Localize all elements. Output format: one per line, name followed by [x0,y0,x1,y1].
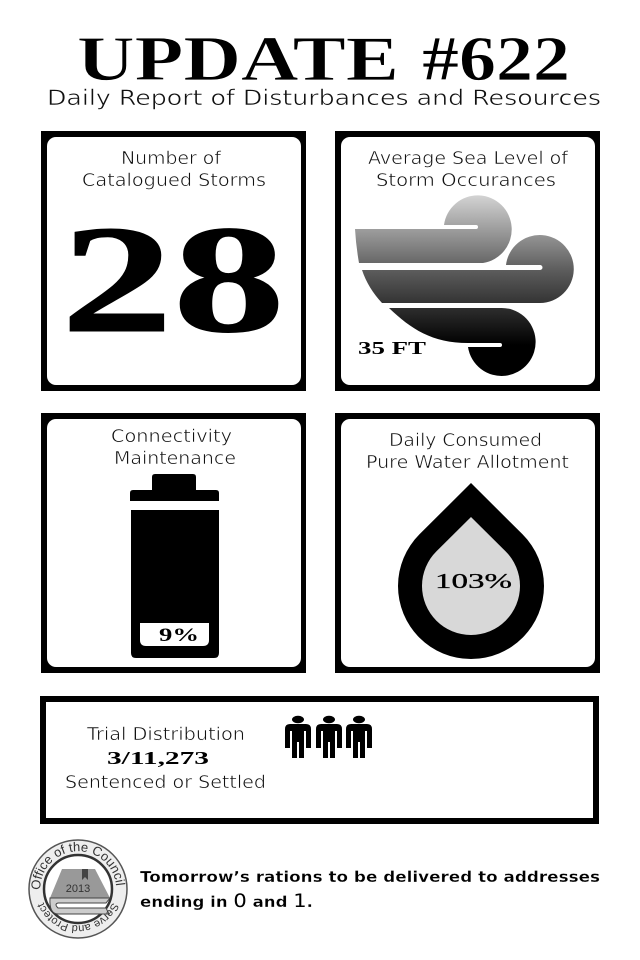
panel: connectivity maintenance [41,413,306,673]
panel: number of catalogued storms [41,131,306,391]
trial text [65,724,266,793]
panel: average sea level [335,131,600,391]
seal: office of the council [28,839,128,939]
panel heading: storms: Number of [121,148,222,169]
storm count: 28 [61,195,285,365]
panel heading: water [366,430,569,473]
icon: wind and clouds [355,195,574,376]
title: #622 [422,24,570,94]
panel heading: connectivity: Connectivity [111,426,232,447]
subtitle: Daily Report of Disturbances and Resources [47,86,601,110]
sea level value: 35 FT [358,338,426,358]
panel heading: connectivity [111,426,236,469]
panel: daily water allotment [335,413,600,673]
seal lettering [31,842,126,934]
footer note [140,868,600,912]
icon: battery [130,474,219,658]
seal lettering: Office of the Council [31,842,126,890]
panel heading: storms [82,148,266,191]
title: UPDATE [77,24,399,94]
seal book: 2013 [66,883,90,895]
panel heading: water: Pure Water Allotment [366,452,569,473]
footer note: Tomorrow’s rations to be delivered to addresses [140,868,600,886]
panel heading: sea level: Average Sea Level of [368,148,569,169]
panel heading: water: Daily Consumed [389,430,542,451]
panel heading: sea level: Storm Occurances [376,170,556,191]
panel heading: sea level [368,148,569,191]
water value: 103% [435,569,512,593]
trial text: Trial Distribution [86,724,245,745]
seal lettering: Serve and Protect [38,902,118,934]
trial text: 3/11,273 [107,748,209,768]
panel: trial distribution [40,696,599,824]
icon: three people [285,716,372,758]
battery value: 9% [159,625,199,646]
trial text: Sentenced or Settled [65,772,266,793]
title [77,24,570,94]
footer note: ending in 0 and 1. [140,890,313,912]
panel heading: connectivity: Maintenance [114,448,236,469]
panel heading: storms: Catalogued Storms [82,170,266,191]
icon: water drop [398,483,544,659]
